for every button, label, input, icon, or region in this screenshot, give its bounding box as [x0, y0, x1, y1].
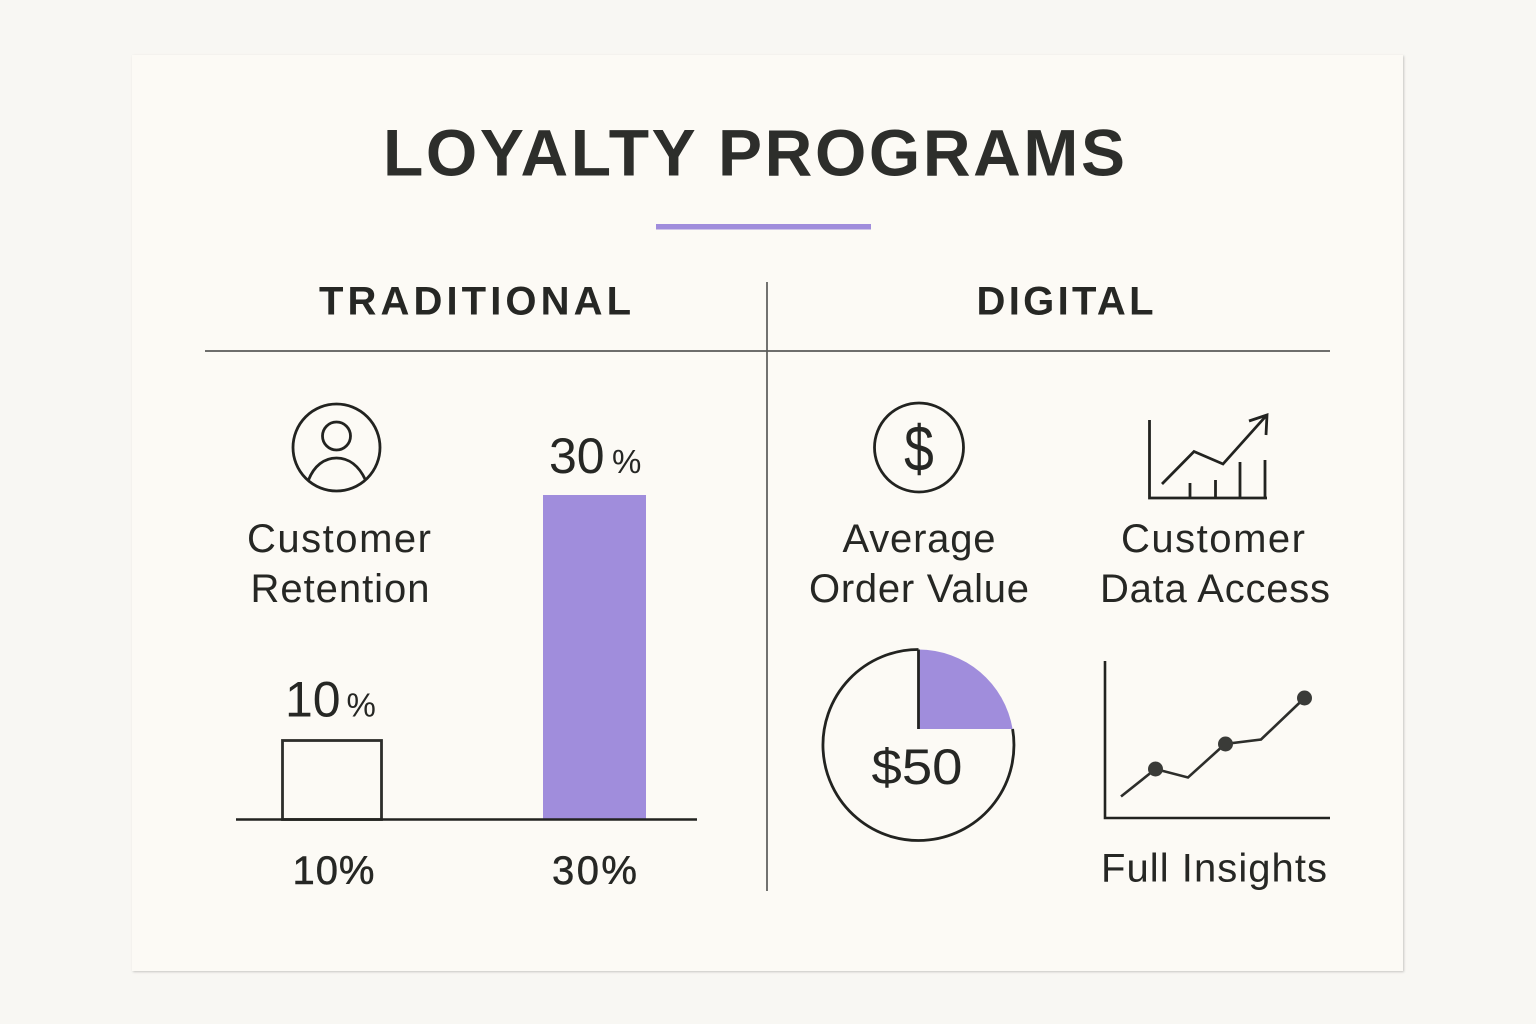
label: customer data access: Customer [1121, 517, 1305, 561]
heading: digital: DIGITAL [976, 280, 1154, 324]
value: $50 [872, 739, 962, 795]
value: 10 percent top: % [346, 686, 376, 724]
label: average order value [809, 517, 1029, 611]
label: customer retention [247, 517, 431, 611]
title: LOYALTY PROGRAMS [383, 116, 1125, 190]
icon: dollar [874, 403, 964, 492]
label: average order value: Order Value [809, 567, 1029, 611]
icon: growth chart [1150, 415, 1267, 498]
heading: traditional: TRADITIONAL [319, 280, 631, 324]
icon: dollar: $ [904, 412, 934, 485]
label: average order value: Average [842, 517, 996, 561]
value: 30 percent top: % [612, 443, 641, 480]
card panel [132, 55, 1403, 971]
axis label: 10: 10% [292, 849, 374, 893]
axis label: 30: 30% [552, 849, 637, 893]
label: customer data access [1100, 517, 1330, 611]
label: customer retention: Retention [250, 567, 430, 611]
bar: traditional [282, 740, 382, 820]
bar: digital [543, 495, 646, 819]
value: 30 percent top: 30 [549, 428, 605, 484]
pie chart [823, 649, 1014, 840]
line chart [1105, 661, 1330, 818]
value: 10 percent top: 10 [285, 672, 341, 728]
bar chart: retention [236, 428, 697, 893]
icon: customer [293, 404, 380, 491]
label: customer data access: Data Access [1100, 567, 1330, 611]
label: full insights: Full Insights [1101, 846, 1327, 890]
label: customer retention: Customer [247, 517, 431, 561]
